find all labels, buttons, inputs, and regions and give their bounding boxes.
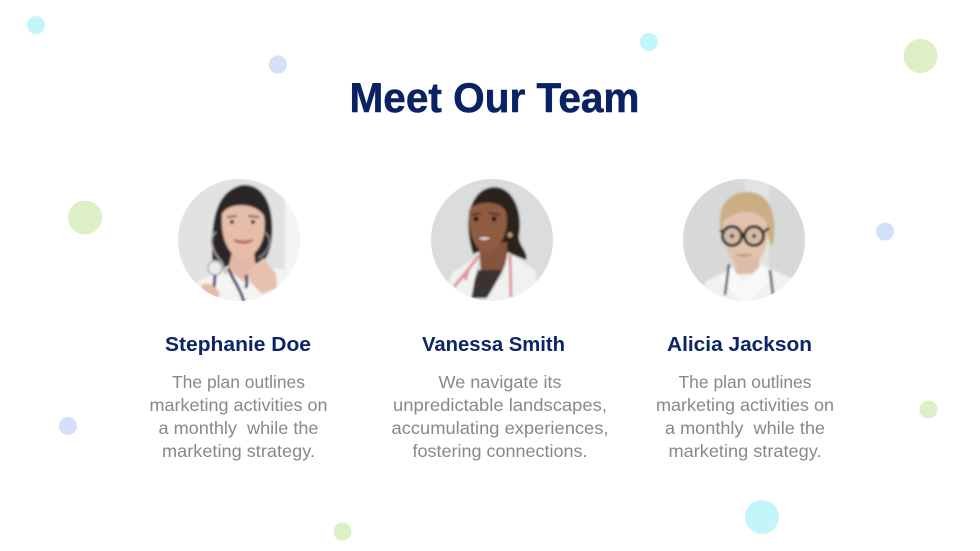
description: Stephanie Doe: a monthly while the bbox=[158, 418, 318, 438]
portrait: Alicia Jackson bbox=[683, 179, 805, 301]
portrait: Vanessa Smith bbox=[431, 179, 553, 301]
description: Vanessa Smith: accumulating experiences, bbox=[392, 418, 608, 438]
description: Alicia Jackson: marketing strategy. bbox=[668, 441, 822, 461]
title: Meet Our Team bbox=[350, 74, 640, 121]
description: Alicia Jackson bbox=[656, 372, 834, 461]
description: Alicia Jackson: a monthly while the bbox=[665, 418, 825, 438]
description: Vanessa Smith: fostering connections. bbox=[412, 441, 588, 461]
team member: Stephanie Doe bbox=[150, 170, 328, 461]
description: Vanessa Smith: unpredictable landscapes, bbox=[393, 395, 607, 415]
description: Stephanie Doe bbox=[150, 372, 328, 461]
team member: Vanessa Smith bbox=[392, 170, 608, 461]
description: Vanessa Smith bbox=[392, 372, 608, 461]
description: Stephanie Doe: The plan outlines bbox=[172, 372, 305, 392]
name: Alicia Jackson: Alicia Jackson bbox=[667, 334, 812, 356]
description: Alicia Jackson: marketing activities on bbox=[656, 395, 834, 415]
description: Alicia Jackson: The plan outlines bbox=[678, 372, 812, 392]
name: Stephanie Doe: Stephanie Doe bbox=[165, 334, 311, 356]
description: Stephanie Doe: marketing strategy. bbox=[162, 441, 315, 461]
name: Vanessa Smith: Vanessa Smith bbox=[422, 334, 565, 356]
description: Vanessa Smith: We navigate its bbox=[438, 372, 562, 392]
portrait: Stephanie Doe bbox=[178, 179, 300, 301]
description: Stephanie Doe: marketing activities on bbox=[150, 395, 328, 415]
team member: Alicia Jackson bbox=[656, 170, 834, 461]
